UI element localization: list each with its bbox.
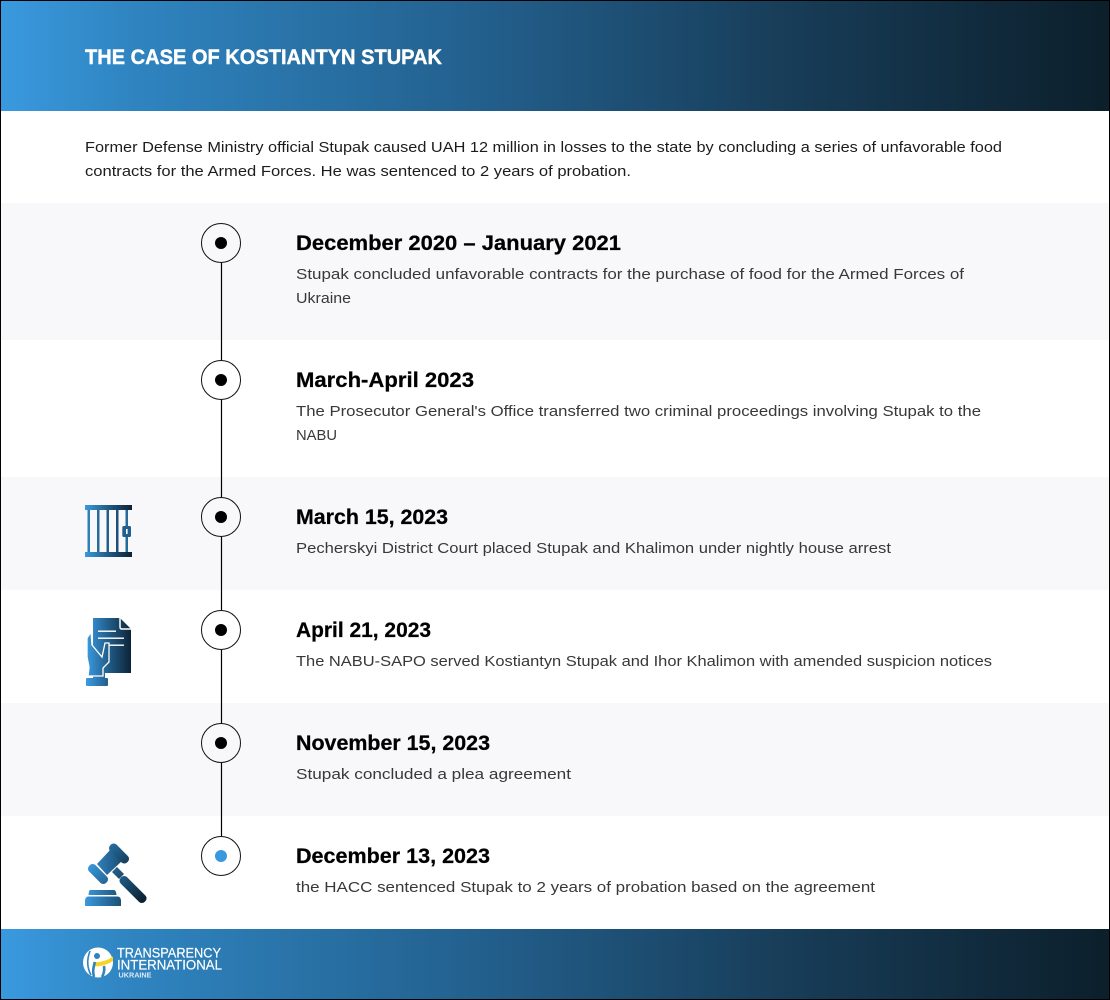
row background: November 15 [1,703,1109,816]
header banner [1,1,1109,111]
logo: Transparency International Ukraine: TRANSPARENCY [117,946,221,960]
logo: Transparency International Ukraine: INTERNATIONAL [117,958,222,972]
timeline marker 2 [202,360,240,400]
timeline marker 5 [202,724,240,762]
event: December 13, 2023 [296,845,876,896]
event: December 2020 - January 2021 [296,232,965,307]
icon: hand holding document [86,618,131,686]
timeline marker 1 [202,224,240,262]
intro text [85,139,1002,180]
title: THE CASE OF KOSTIANTYN STUPAK [85,46,442,69]
event: December 13, 2023: December 13, 2023 [296,845,490,868]
event: December 2020 - January 2021: Ukraine [296,290,351,307]
event: April 21, 2023 [296,619,992,670]
timeline marker 4 [202,610,240,650]
event: March-April 2023: The Prosecutor General's Office transferred two criminal proceedings involving Stupak to the [296,403,981,420]
event: December 2020 - January 2021: Stupak concluded unfavorable contracts for the purchase of food for the Armed Forces of [296,266,965,283]
event: November 15, 2023 [296,732,572,783]
event: November 15, 2023: Stupak concluded a plea agreement [296,766,572,783]
row background: March 15 [1,477,1109,590]
event: April 21, 2023: April 21, 2023 [296,619,431,642]
timeline line [220,243,222,856]
event: March 15, 2023: March 15, 2023 [296,506,448,529]
event: March-April 2023: March-April 2023 [296,369,474,392]
footer banner [1,929,1109,999]
intro text: Former Defense Ministry official Stupak caused UAH 12 million in losses to the state by concluding a series of unfavorable food [85,139,1002,156]
event: April 21, 2023: The NABU-SAPO served Kostiantyn Stupak and Ihor Khalimon with amended suspicion notices [296,653,992,670]
icon: prison bars [85,505,132,557]
row background: December 2020 [1,203,1109,340]
event: December 13, 2023: the HACC sentenced Stupak to 2 years of probation based on the agreement [296,879,876,896]
timeline marker 6 [202,836,240,876]
event: March 15, 2023 [296,506,892,557]
icon: judge gavel [85,842,148,906]
logo: Transparency International Ukraine [83,946,222,980]
timeline marker 3 [202,498,240,536]
logo: Transparency International Ukraine: UKRAINE [118,972,152,980]
event: November 15, 2023: November 15, 2023 [296,732,490,755]
event: March-April 2023 [296,369,981,444]
event: March-April 2023: NABU [296,427,337,444]
event: December 2020 - January 2021: December 2020 – January 2021 [296,232,621,255]
event: March 15, 2023: Pecherskyi District Court placed Stupak and Khalimon under nightly house arrest [296,540,892,557]
intro text: contracts for the Armed Forces. He was sentenced to 2 years of probation. [85,163,631,180]
